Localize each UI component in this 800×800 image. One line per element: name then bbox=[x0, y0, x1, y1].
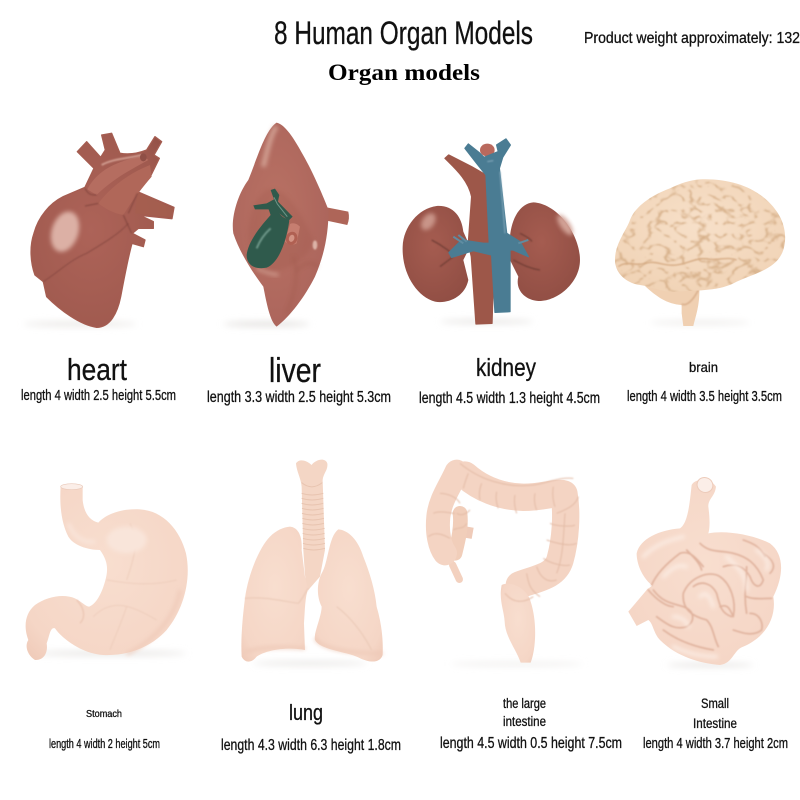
organ: lungs and trachea bbox=[241, 460, 383, 665]
label: stomach: Stomach bbox=[86, 708, 122, 720]
label: stomach: length 4 width 2 height 5cm bbox=[49, 737, 160, 751]
label: small intestine: Small bbox=[701, 696, 729, 711]
organ: liver with gallbladder bbox=[223, 123, 349, 327]
organ: kidneys and vessels bbox=[403, 139, 580, 324]
label: brain bbox=[627, 359, 782, 405]
label: heart bbox=[21, 352, 176, 404]
label: liver: liver bbox=[269, 352, 321, 390]
label: kidney: kidney bbox=[476, 354, 536, 382]
label: large intestine: length 4.5 width 0.5 height 7.5cm bbox=[440, 735, 622, 752]
label: small intestine: Intestine bbox=[693, 716, 737, 731]
organ: heart bbox=[23, 133, 174, 327]
label: liver: length 3.3 width 2.5 height 5.3cm bbox=[207, 389, 391, 406]
organ: stomach bbox=[26, 484, 188, 660]
label: large intestine: intestine bbox=[503, 714, 546, 729]
label: brain: brain bbox=[689, 359, 718, 375]
label: large intestine: the large bbox=[503, 696, 546, 711]
organ: small intestine bbox=[628, 475, 781, 667]
label: stomach bbox=[49, 708, 160, 751]
label: small intestine bbox=[643, 696, 788, 752]
label: liver bbox=[207, 352, 391, 406]
subtitle: Organ models bbox=[328, 60, 480, 85]
label: lung: length 4.3 width 6.3 height 1.8cm bbox=[221, 737, 401, 754]
label: large intestine bbox=[440, 696, 622, 752]
label: lung: lung bbox=[289, 700, 323, 725]
title: 8 Human Organ Models bbox=[274, 15, 533, 51]
label: heart: heart bbox=[67, 352, 127, 387]
organ: brain bbox=[615, 179, 785, 326]
label: kidney bbox=[419, 354, 600, 407]
label: kidney: length 4.5 width 1.3 height 4.5cm bbox=[419, 390, 600, 407]
label: heart: length 4 width 2.5 height 5.5cm bbox=[21, 387, 176, 404]
organ: large intestine bbox=[428, 463, 583, 666]
label: lung bbox=[221, 700, 401, 754]
